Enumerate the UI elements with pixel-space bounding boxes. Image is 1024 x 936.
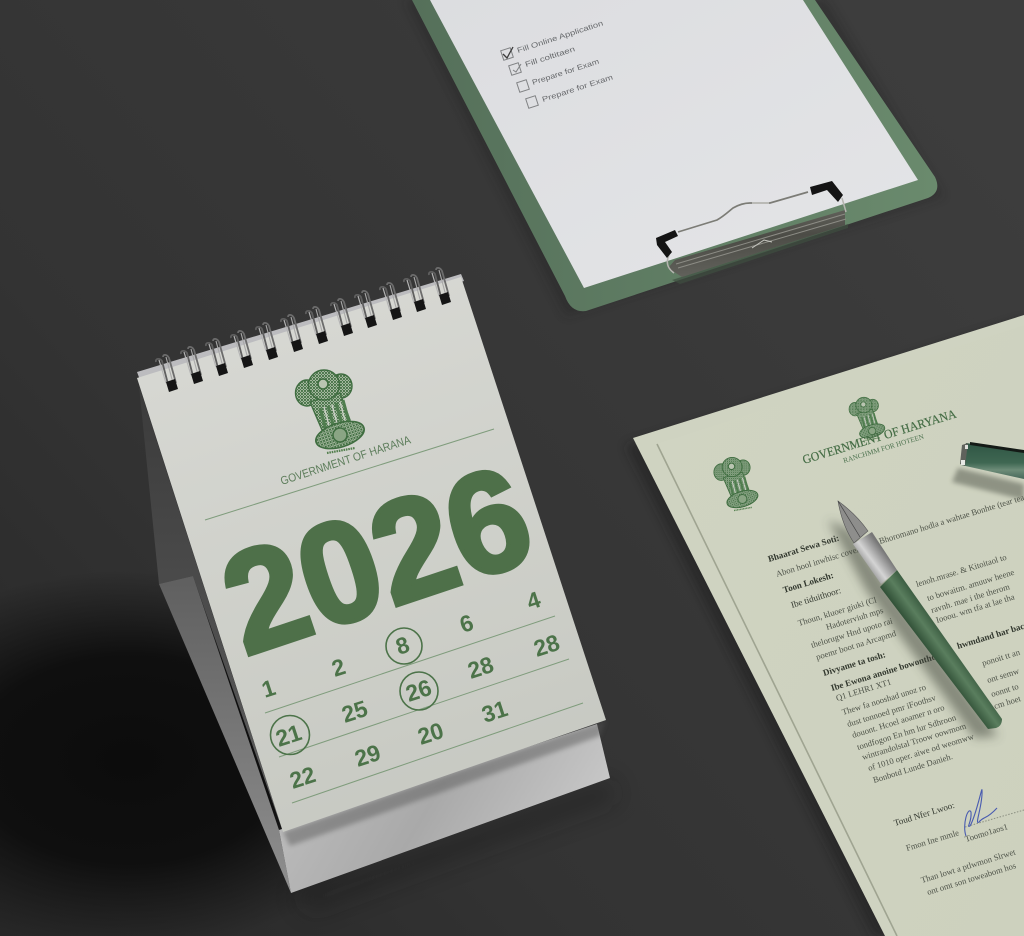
signature scribble — [965, 790, 997, 836]
icon: left emblem on letter — [714, 457, 760, 511]
date row 1: 1 — [258, 674, 279, 703]
checklist row 2: Fill coltitaen — [524, 44, 576, 69]
date row 1: 4 — [523, 586, 544, 615]
calendar page shadow on stand — [283, 720, 606, 846]
body: left column: thelorugw Hnd upoto rai — [810, 615, 894, 650]
checklist row 1: Fill Online Application — [516, 19, 604, 55]
body: left column: Divyame ta tosh: — [822, 649, 887, 678]
spiral binding — [156, 268, 451, 392]
pen barrel — [880, 570, 1002, 729]
clipboard metal clip — [656, 181, 848, 284]
pen section — [853, 532, 897, 584]
signature block — [893, 790, 1024, 853]
clipboard shadow — [405, 0, 944, 316]
pen nib — [838, 501, 868, 543]
calendar back pages — [137, 274, 464, 380]
body: left column: Hadoterviuh mps — [825, 605, 885, 632]
calendar shadow — [0, 570, 620, 936]
desk calendar — [0, 268, 620, 936]
front sheet edge — [657, 444, 897, 936]
signature block: Toomo1aos1 — [964, 821, 1009, 844]
clipboard paper sheet — [430, 0, 918, 288]
body: right column: Bhoromano hodla a wahtae Bonhte (tear tea — [878, 492, 1024, 546]
date row 3 — [286, 695, 511, 794]
body: right column: oonnt to — [990, 681, 1020, 699]
date row 3: 22 — [286, 761, 319, 794]
date row 3: 20 — [414, 717, 447, 750]
date row 2: 26 — [402, 674, 435, 707]
checklist — [501, 19, 614, 108]
body: left column: Ibe tiduithoor: — [790, 585, 842, 610]
checklist row 4: Prepare for Exam — [541, 72, 614, 104]
date row 3: 29 — [351, 739, 384, 772]
official letter — [626, 315, 1024, 936]
body: right column: lenoh.mrase. & Kitoitaol to — [915, 552, 1008, 589]
body: right column: ont semw — [986, 665, 1021, 685]
letterhead subtitle: RANCHMM FOR HOTEEN — [842, 432, 926, 465]
body: left column: Abon hool inwhisc covers — [775, 543, 864, 579]
letter back sheet — [633, 315, 1024, 936]
body: left column: Ibe Ewona anoine bowonthone — [830, 649, 946, 693]
date row 2 — [272, 629, 563, 752]
pen shadow — [828, 520, 998, 738]
pen cap — [952, 442, 1024, 500]
calendar header rule — [205, 429, 494, 520]
date row 1: 6 — [456, 609, 477, 638]
body: right column: ravnh. mae i the therom — [930, 581, 1011, 615]
date row 1 — [258, 586, 544, 703]
body: left column: Toon Lokesh: — [782, 570, 835, 595]
icon: state emblem on calendar — [296, 370, 367, 454]
calendar year: 2026 — [204, 436, 550, 685]
letter shadow — [626, 320, 1024, 936]
body: left column: of 1010 oper. aiwe od weomww — [867, 731, 976, 773]
cap body — [961, 443, 1024, 479]
date row 3: 31 — [478, 695, 511, 728]
body: right column: to bowaitm. amuuw heene — [926, 567, 1015, 603]
closing paragraph: Than lowt a ptlwmon Slrwet — [920, 846, 1017, 885]
body: left column: douont. Hcoel aoamer n oro — [851, 702, 946, 740]
calendar base front — [279, 724, 610, 893]
cap shadow — [952, 468, 1024, 500]
body: right column: cm hoet — [993, 693, 1022, 711]
signature block: Fmon Ine mmle — [905, 827, 960, 853]
date row 2: 21 — [272, 719, 305, 752]
body: right column: Iooou. wm tfa at lae tha — [935, 591, 1016, 625]
body: left column: Q1 LEHR1 XT1 — [835, 677, 892, 703]
letterhead title: GOVERNMENT OF HARYANA — [801, 407, 958, 467]
calendar organisation name: GOVERNMENT OF HARANA — [279, 433, 412, 488]
calendar front page — [137, 277, 606, 832]
fountain pen on letter — [828, 501, 1002, 738]
clipboard — [405, 0, 944, 316]
calendar date grid — [258, 586, 583, 803]
body: left column: poemr boot na Arcapmd — [815, 628, 898, 662]
calendar base side strip — [159, 576, 291, 893]
body: left column: Thew fa nooshad unoz ro — [841, 682, 927, 717]
clipboard board — [412, 0, 937, 311]
letter body text — [767, 492, 1024, 897]
body: right column: ponoit tt an — [981, 647, 1022, 668]
body: left column: wintrandolstal Troow oowmom — [861, 721, 968, 762]
closing paragraph: ont omt son toweabom hos — [926, 860, 1018, 897]
icon: centre emblem on letter — [849, 397, 886, 441]
body: right column: hwmdand har bac — [956, 621, 1024, 651]
letter front sheet — [657, 325, 1024, 936]
date row 1: 2 — [328, 653, 349, 682]
body: left column: Thoun, kluoer giuki (Cl — [797, 594, 878, 628]
date row 2: 25 — [338, 695, 371, 728]
circled dates — [270, 628, 438, 754]
row rules — [265, 616, 583, 803]
date row 2: 28 — [530, 629, 563, 662]
body: left column: Bhaarat Sewa Soti: — [767, 533, 840, 564]
signature block: Toud Nfer Lwoo: — [893, 800, 956, 828]
body: left column: Bonbotd Lunde Danieh. — [872, 751, 954, 785]
calendar rear support — [139, 386, 283, 832]
checklist row 3: Prepare for Exam — [531, 57, 600, 87]
date row 2: 28 — [464, 651, 497, 684]
body: left column: dust tonnoed pmr iFoothsv — [846, 692, 938, 729]
body: left column — [767, 533, 976, 785]
body: left column: tondfogon En hm lur Sdhroon — [856, 712, 958, 752]
date row 1: 8 — [392, 631, 413, 660]
body: right column — [878, 492, 1024, 711]
